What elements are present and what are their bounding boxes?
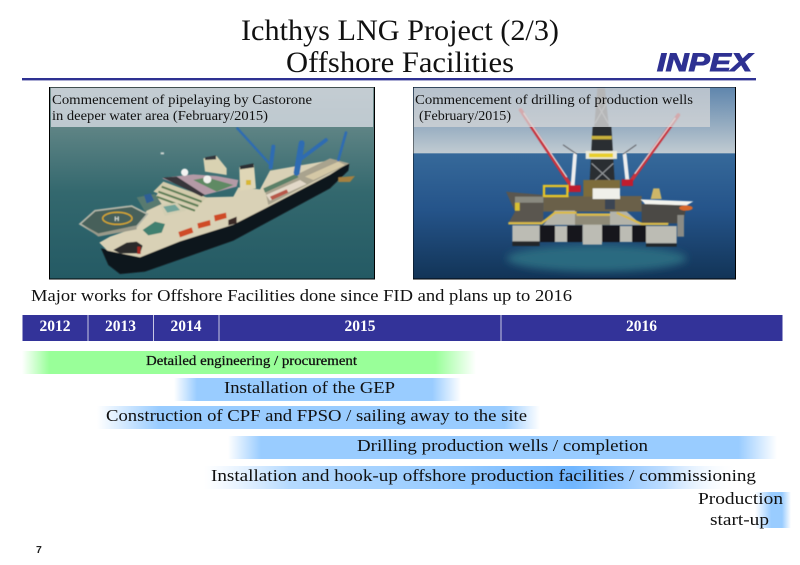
icon: lifeboats: [178, 213, 227, 237]
forward deck: [265, 158, 349, 205]
title: [241, 14, 559, 79]
title: Ichthys LNG Project (2/3): [241, 14, 559, 47]
icon: cranes: [237, 128, 346, 173]
stern opening: [113, 242, 143, 253]
icon: drilling derrick: [586, 88, 617, 188]
bar: installation and hook-up: Installation and hook-up offshore production facilities / commissioning: [211, 466, 757, 485]
icon: platform columns: [512, 215, 684, 247]
panel: pipelaying photo: [49, 87, 375, 280]
timeline header: 2015: [344, 318, 376, 335]
timeline header: 2016: [626, 318, 657, 335]
sea reflection: [507, 245, 687, 272]
bar: production start-up: [698, 489, 791, 529]
pool deck: [143, 222, 165, 235]
bar: installation of the GEP: Installation of the GEP: [224, 378, 395, 397]
icon: ship hull: [101, 163, 349, 274]
bar: drilling production wells: [228, 436, 777, 459]
logo: INPEX: INPEX: [657, 49, 754, 77]
caption: pipelaying: in deeper water area (February/2015): [52, 108, 268, 123]
page number: 7: [36, 544, 42, 556]
ship side: [99, 160, 347, 257]
subheading: Major works for Offshore Facilities done since FID and plans up to 2016: [31, 286, 572, 305]
panel: pipelaying photo: H: [114, 216, 119, 223]
caption: pipelaying: [51, 88, 373, 127]
caption: pipelaying: Commencement of pipelaying by Castorone: [52, 92, 312, 107]
icon: red cranes: [521, 110, 678, 188]
bar: detailed engineering: [22, 351, 476, 374]
title: Offshore Facilities: [286, 46, 514, 79]
caption: drilling: Commencement of drilling of production wells: [415, 92, 693, 107]
icon: helideck: [80, 206, 147, 235]
timeline header: 2012: [40, 318, 71, 335]
timeline header: 2013: [105, 318, 136, 335]
bar: installation of the GEP: [174, 378, 461, 401]
timeline header: [22, 315, 782, 341]
bar: construction of CPF and FPSO: Construction of CPF and FPSO / sailing away to the site: [106, 406, 527, 425]
timeline header: 2014: [170, 318, 202, 335]
caption: drilling: [414, 88, 710, 127]
panel: drilling photo: [413, 87, 736, 280]
caption: drilling: (February/2015): [419, 108, 511, 123]
superstructure tiers: [153, 182, 207, 208]
bar: detailed engineering: Detailed engineering / procurement: [146, 353, 357, 368]
bar: production start-up: start-up: [710, 510, 769, 529]
icon: platform deck: [506, 180, 693, 225]
bar: drilling production wells: Drilling production wells / completion: [357, 436, 649, 455]
bar: production start-up: Production: [698, 489, 784, 508]
